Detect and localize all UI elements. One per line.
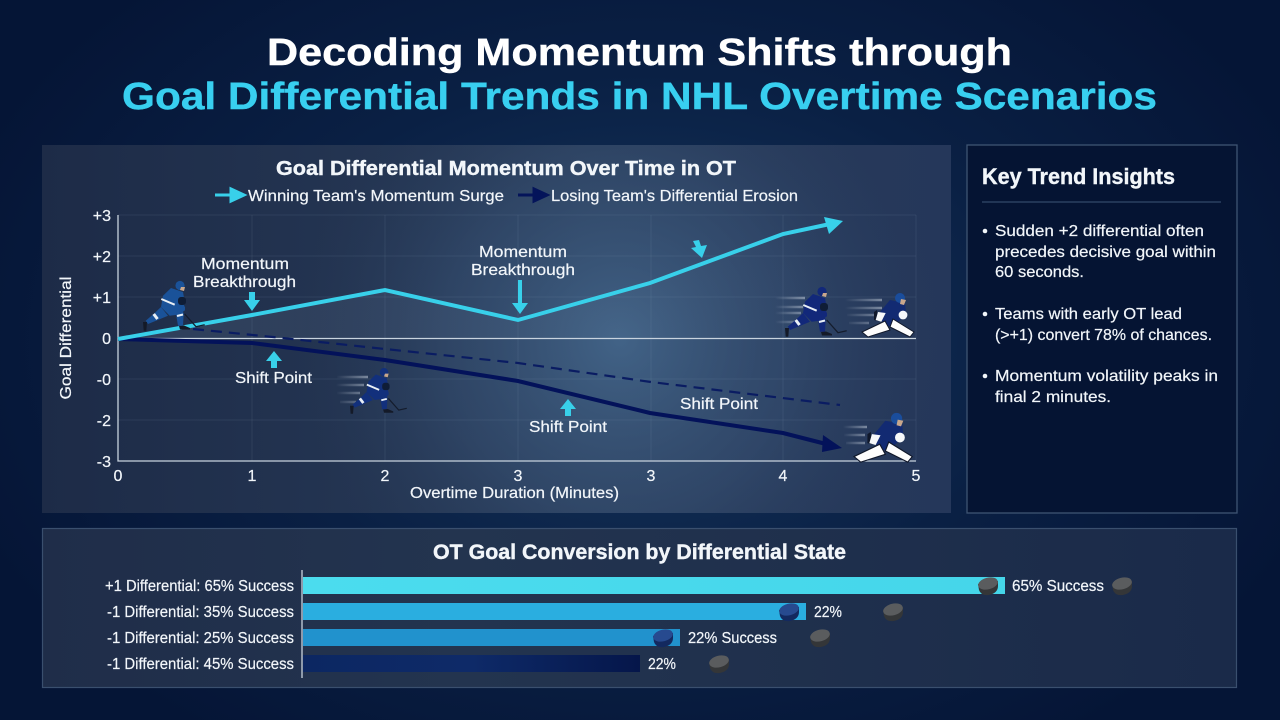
x axis ticks xyxy=(114,468,921,485)
insight 3: Momentum volatility peaks in xyxy=(995,368,1218,385)
bar 3: 22% Success xyxy=(688,630,777,647)
annotation: momentum breakthrough 1 xyxy=(193,256,296,311)
bar 4: 22% xyxy=(648,656,676,673)
bar 1: 65% Success xyxy=(1012,578,1104,595)
x axis ticks: 0 xyxy=(114,468,123,485)
axes xyxy=(118,215,916,461)
chart title: Goal Differential Momentum Over Time in OT xyxy=(276,158,736,180)
losing team line xyxy=(118,339,842,452)
icon: goalie top with speed lines xyxy=(845,293,914,337)
bar labels xyxy=(105,578,294,673)
annotation: momentum breakthrough 2: Momentum xyxy=(479,244,567,261)
bar labels: -1 Differential: 25% Success xyxy=(107,630,294,647)
y axis ticks: +3 xyxy=(93,208,111,225)
dashed projection line xyxy=(193,329,840,405)
icon: skater 2 with speed lines xyxy=(336,368,407,414)
panel: key trend insights xyxy=(967,145,1237,513)
y axis ticks: -3 xyxy=(97,454,111,471)
bar 4 xyxy=(303,653,730,673)
x axis ticks: 5 xyxy=(912,468,921,485)
legend: Winning Team's Momentum Surge xyxy=(248,188,504,205)
annotation: shift point 2: Shift Point xyxy=(529,419,608,436)
x axis ticks: 4 xyxy=(779,468,788,485)
title: Goal Differential Trends in NHL Overtime Scenarios xyxy=(122,76,1157,118)
y axis ticks xyxy=(93,208,111,471)
x axis ticks: 3 xyxy=(647,468,656,485)
conversion heading: OT Goal Conversion by Differential State xyxy=(433,541,846,564)
bar 3 xyxy=(303,627,831,647)
insight 2 xyxy=(983,306,1212,344)
bar 1 xyxy=(303,575,1133,595)
title xyxy=(122,32,1157,118)
bar labels: -1 Differential: 35% Success xyxy=(107,604,294,621)
insight 3: final 2 minutes. xyxy=(995,389,1111,406)
insight 3 xyxy=(983,368,1218,406)
legend xyxy=(215,188,798,205)
bar labels: -1 Differential: 45% Success xyxy=(107,656,294,673)
icon: skater 3 with speed lines xyxy=(775,287,847,337)
y axis ticks: 0 xyxy=(102,331,111,348)
annotation: momentum breakthrough 1: Momentum xyxy=(201,256,289,273)
y axis title: Goal Differential xyxy=(58,276,75,400)
annotation: momentum breakthrough 2: Breakthrough xyxy=(471,262,575,279)
annotation: momentum breakthrough 2 xyxy=(471,244,575,314)
bar 2 xyxy=(303,601,904,621)
insight 1: precedes decisive goal within xyxy=(995,244,1216,261)
insight 1: Sudden +2 differential often xyxy=(995,223,1204,240)
x axis ticks: 2 xyxy=(381,468,390,485)
insight 1 xyxy=(983,223,1216,281)
area under winning line xyxy=(118,222,842,339)
winning team line xyxy=(118,217,843,339)
panel: OT goal conversion xyxy=(42,528,1236,688)
arrow: surge marker xyxy=(691,240,707,258)
annotation: shift point 3: Shift Point xyxy=(680,396,759,413)
y axis ticks: -0 xyxy=(97,372,111,389)
bar 2: 22% xyxy=(814,604,842,621)
x axis ticks: 3 xyxy=(514,468,523,485)
x axis title: Overtime Duration (Minutes) xyxy=(410,485,619,502)
insights heading: Key Trend Insights xyxy=(982,164,1175,189)
y axis ticks: +2 xyxy=(93,249,111,266)
bar labels: +1 Differential: 65% Success xyxy=(105,578,294,595)
title: Decoding Momentum Shifts through xyxy=(267,32,1012,74)
insight 2: Teams with early OT lead xyxy=(995,306,1182,323)
annotation: shift point 2 xyxy=(529,399,608,436)
insight 2: (>+1) convert 78% of chances. xyxy=(995,327,1212,344)
annotation: shift point 1 xyxy=(235,351,313,387)
legend: Losing Team's Differential Erosion xyxy=(551,188,798,205)
annotation: shift point 1: Shift Point xyxy=(235,370,313,387)
y axis ticks: -2 xyxy=(97,413,111,430)
x axis ticks: 1 xyxy=(248,468,257,485)
icon: goalie bottom with speed lines xyxy=(843,413,912,462)
y axis ticks: +1 xyxy=(93,290,111,307)
insight 1: 60 seconds. xyxy=(995,264,1084,281)
panel: momentum line chart xyxy=(42,145,951,513)
icon: skater 1 xyxy=(143,281,205,331)
annotation: momentum breakthrough 1: Breakthrough xyxy=(193,274,296,291)
